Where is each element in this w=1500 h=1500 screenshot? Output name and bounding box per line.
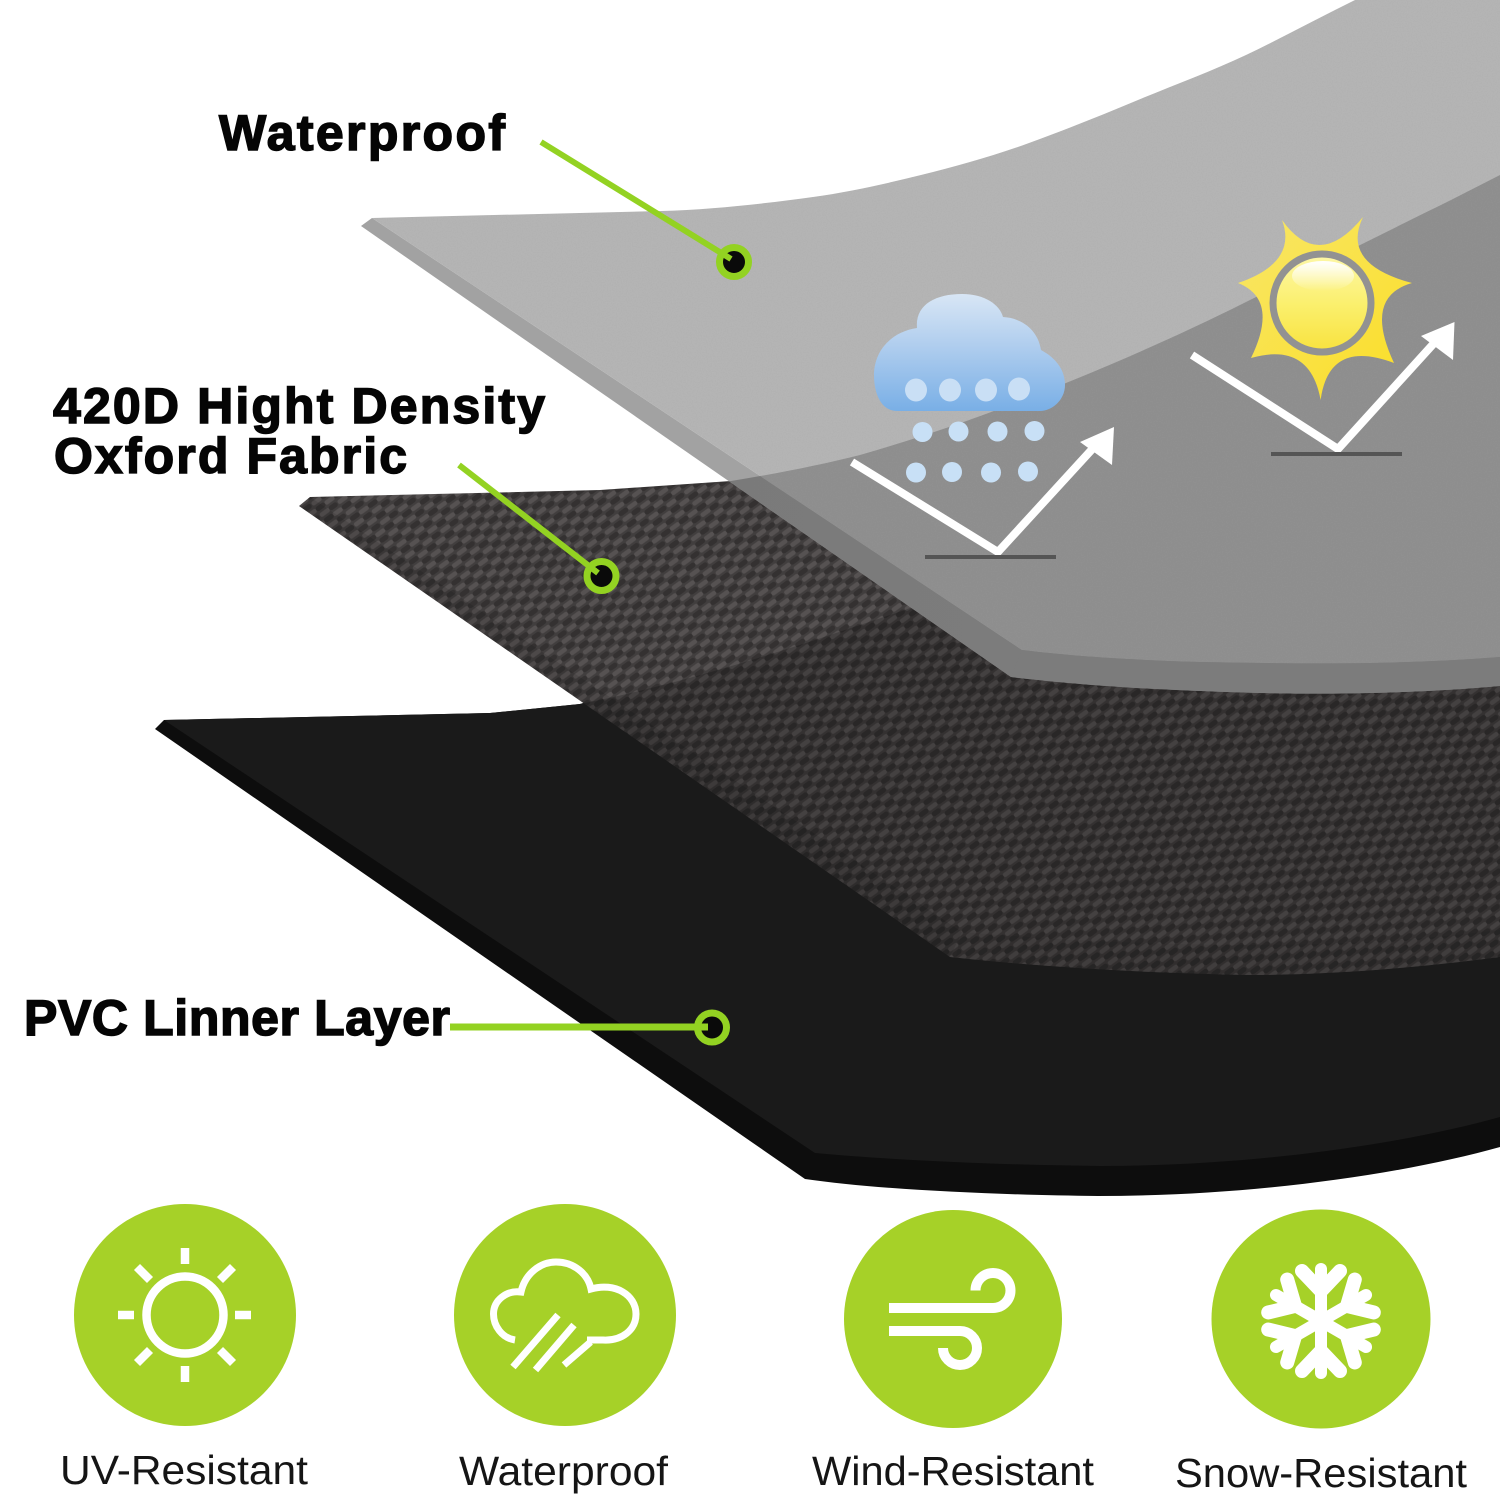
callout: waterproof pointer: [541, 142, 748, 276]
heading: PVC Linner Layer: PVC Linner Layer: [24, 990, 450, 1046]
badge: UV-Resistant: [74, 1204, 296, 1426]
panel: 420D oxford fabric layer: [299, 476, 1500, 975]
label: Waterproof: Waterproof: [459, 1448, 669, 1494]
arrow: UV deflected: [1192, 322, 1454, 454]
heading: 420D Hight Density: 420D Hight Density: [53, 378, 545, 434]
arrow: snow deflected: [852, 427, 1114, 557]
label: Snow-Resistant: Snow-Resistant: [1175, 1450, 1468, 1496]
label: Wind-Resistant: Wind-Resistant: [812, 1448, 1095, 1494]
icon: snow cloud: [874, 294, 1065, 482]
panel: PVC liner layer: [155, 250, 1500, 1196]
heading: Oxford Fabric: Oxford Fabric: [54, 428, 407, 484]
badge: Wind-Resistant: [844, 1210, 1062, 1428]
callout: fabric pointer: [459, 465, 616, 590]
heading: Waterproof: Waterproof: [219, 105, 505, 161]
badge: Snow-Resistant: [1212, 1210, 1430, 1428]
panel: waterproof coating layer: [361, 0, 1500, 694]
callout: PVC pointer: [450, 1013, 726, 1042]
label: UV-Resistant: UV-Resistant: [60, 1447, 309, 1493]
badge: Waterproof: [454, 1204, 676, 1426]
icon: sun: [1238, 217, 1412, 400]
